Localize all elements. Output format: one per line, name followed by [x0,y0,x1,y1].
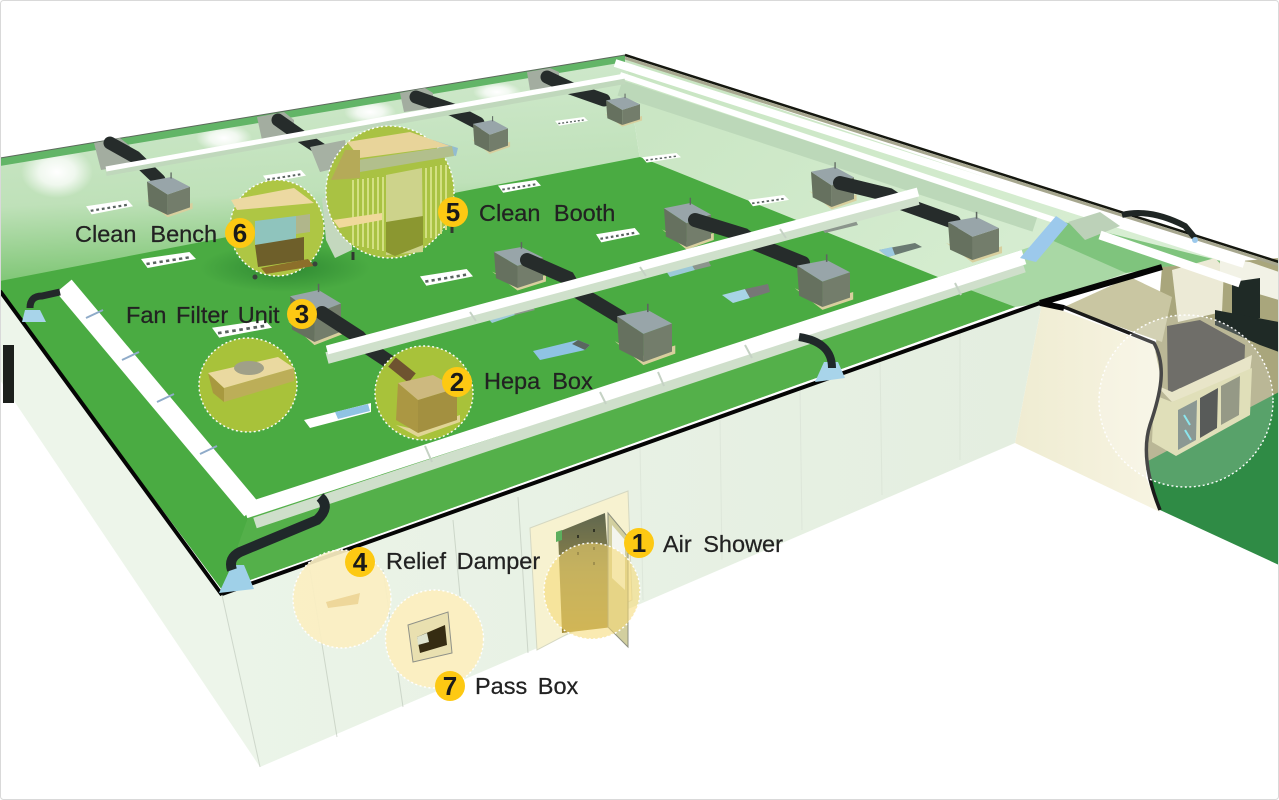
callout: 2 Hepa Box: 2 [450,367,464,397]
machine room highlight circle [1099,315,1273,487]
front wall [222,303,1042,767]
black post [3,345,14,403]
duct: left relief hose [22,292,60,322]
callout: 2 Hepa Box: Hepa Box [484,368,593,394]
left wall [0,292,260,767]
callout: 7 Pass Box [435,671,579,701]
clean booth highlight circle [326,126,454,258]
callout: 3 Fan Filter Unit [126,299,317,329]
callout: 3 Fan Filter Unit: Fan Filter Unit [126,302,280,328]
back row cubes [145,94,642,217]
relief damper highlight circle [293,550,391,648]
roof ducts, right end [1068,212,1240,283]
back wall: left translucent [0,58,640,282]
cream duct block [1172,258,1224,322]
green floor [0,157,1015,590]
black machine [1215,278,1279,352]
cream end wall [1015,303,1162,512]
left top edge [0,291,222,595]
white box, far right [1220,258,1279,300]
back vents [86,117,789,338]
hepa box highlight circle [375,346,473,440]
duct: back [106,76,625,173]
right wall: translucent [625,58,1230,303]
soft light glows on the back wall [21,82,521,198]
callout: 5 Clean Booth: 5 [446,197,460,227]
wall cut edge [1064,307,1161,510]
thick top edge of the wall [222,267,1162,594]
duct: front [245,257,1024,523]
callout: 6 Clean Bench: 6 [233,218,247,248]
duct: right outer [615,63,1244,264]
callout: 6 Clean Bench [75,218,255,248]
duct: middle relief hose [799,337,845,382]
green ledge right [1040,222,1225,273]
callout: 2 Hepa Box [442,367,593,397]
back top ledge left [0,55,625,166]
air shower highlight circle [544,543,640,639]
flexible ducts, middle [322,183,954,377]
callout: 7 Pass Box: 7 [443,671,457,701]
callout: 1 Air Shower: 1 [632,528,646,558]
flexible ducts, back row [110,77,604,180]
green strip in front of the duct [222,290,1015,590]
callout: 5 Clean Booth: Clean Booth [479,200,615,226]
booth frame and supports [310,140,458,260]
back wall mounts [94,68,559,170]
back top edge right [625,55,1279,265]
callout: 4 Relief Damper: 4 [353,547,368,577]
callout: 6 Clean Bench: Clean Bench [75,221,217,247]
cubes, source row [288,162,857,345]
beige inner wall [1064,277,1172,342]
machine room floor [1146,392,1279,565]
callout: 4 Relief Damper [345,547,540,577]
callout: 5 Clean Booth [438,197,615,227]
air shower interior [556,513,613,633]
callout: 4 Relief Damper: Relief Damper [386,548,540,574]
cubes, destination row [615,212,1002,365]
air handling unit [1152,320,1252,456]
blue slanted duct [1020,216,1068,262]
clean bench highlight circle [230,180,324,280]
lower right wall tint [938,236,1126,307]
callout: 7 Pass Box: Pass Box [475,673,579,699]
duct: front relief hose [219,497,325,593]
air shower door leaf [608,513,628,647]
callout: 1 Air Shower [624,528,783,558]
duct: left [64,286,252,510]
callout: 3 Fan Filter Unit: 3 [295,299,309,329]
duct: right inner [620,75,1060,224]
duct: middle [327,192,918,358]
floor shadow under bench [200,244,370,292]
fan filter unit highlight circle [199,338,297,432]
callout: 1 Air Shower: Air Shower [663,531,783,557]
machine room background [1146,258,1279,470]
pass box highlight circle [386,590,484,688]
air shower door surround [530,491,632,650]
wall panel seams [222,330,960,767]
ceiling vents with blue filters [304,219,922,428]
